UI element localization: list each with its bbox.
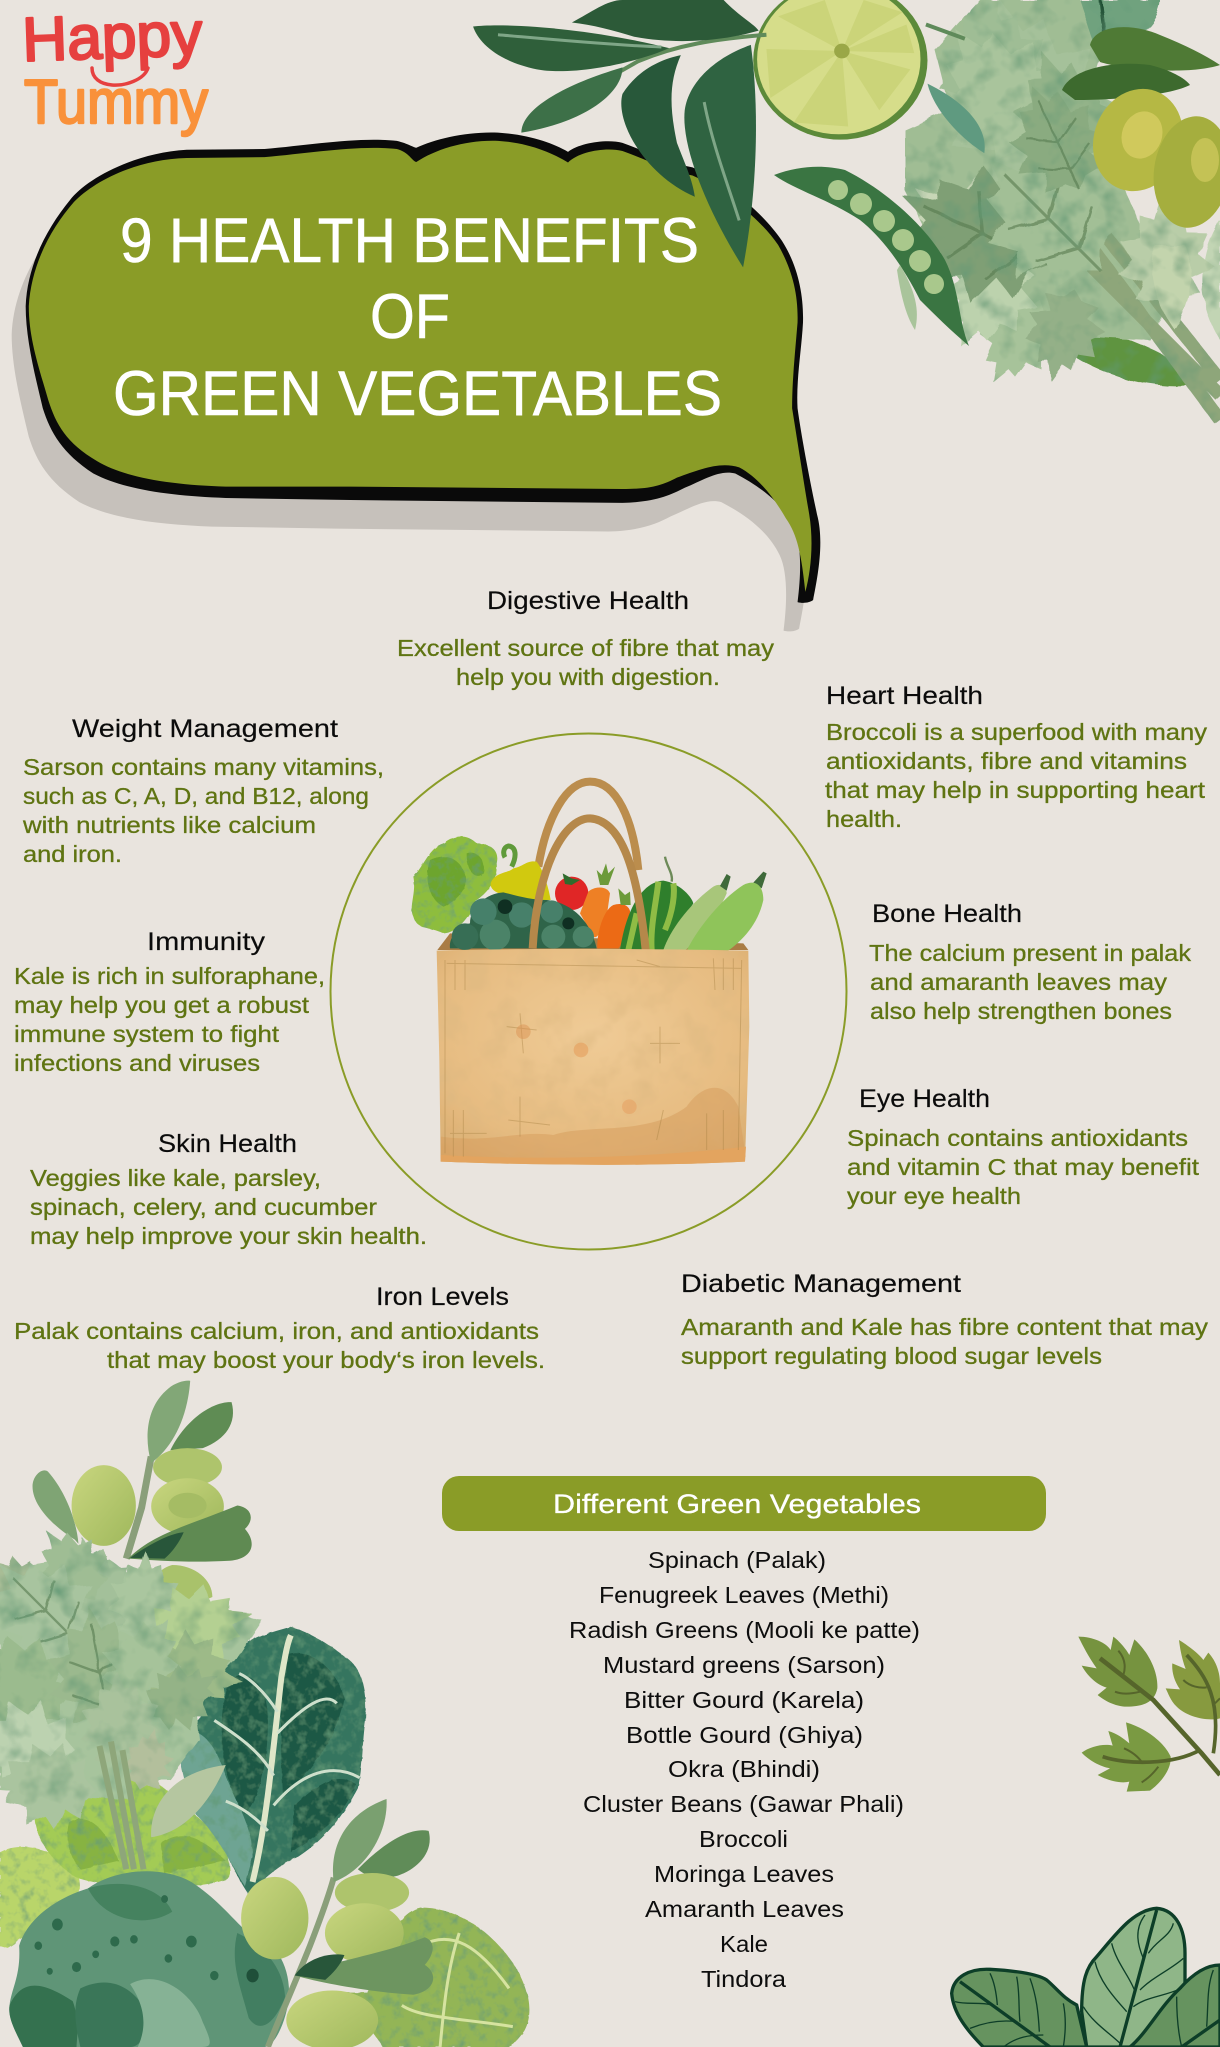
benefit: iron levels: that may boost your body‘s iron levels. (107, 1347, 545, 1373)
lettuce (412, 836, 497, 933)
parsley (888, 149, 1038, 295)
tomato (555, 877, 588, 910)
vegetable list: Amaranth Leaves (645, 1896, 844, 1922)
benefit: eye health (847, 1085, 1200, 1209)
benefit: eye health: your eye health (847, 1183, 1021, 1209)
illustration: olive branch and lime (473, 0, 985, 267)
illustration: bottom left foreground (9, 1742, 529, 2047)
benefit: heart health: antioxidants, fibre and vitamins (826, 748, 1187, 774)
lower olive sprig (241, 1799, 433, 2047)
benefit: bone health: also help strengthen bones (870, 998, 1172, 1024)
vegetable list: Fenugreek Leaves (Methi) (599, 1582, 889, 1608)
benefit: iron levels: Palak contains calcium, iron, and antioxidants (14, 1318, 539, 1344)
benefit: weight management: Sarson contains many vitamins, (23, 754, 384, 780)
benefit: eye health: and vitamin C that may benefit (847, 1154, 1200, 1180)
cabbage (337, 1907, 529, 2047)
illustration: pea pod (774, 167, 969, 346)
vegetable list: Bitter Gourd (Karela) (624, 1687, 864, 1713)
benefit: immunity: immune system to fight (14, 1021, 280, 1047)
benefit: immunity: Kale is rich in sulforaphane, (14, 963, 325, 989)
illustration: top right foliage (874, 0, 1220, 420)
benefit: digestive health: Excellent source of fibre that may (397, 635, 775, 661)
benefit: diabetic management (681, 1270, 1209, 1369)
stems (1075, 235, 1220, 420)
cucumber (1050, 325, 1196, 386)
benefit: eye health: Eye Health (859, 1085, 990, 1113)
bag body (437, 949, 749, 1165)
central circle (330, 734, 846, 1250)
title (113, 206, 722, 429)
front handle (533, 818, 646, 950)
title: 9 HEALTH BENEFITS (120, 206, 699, 276)
benefit: immunity: infections and viruses (14, 1050, 260, 1076)
illustration: bottom right spinach leaves (952, 1908, 1220, 2047)
leaf (473, 25, 669, 71)
broccoli (9, 1871, 289, 2047)
benefit: heart health: health. (826, 806, 902, 832)
benefit: eye health: Spinach contains antioxidants (847, 1125, 1188, 1151)
benefit: immunity: Immunity (147, 928, 266, 956)
benefit: weight management: and iron. (23, 841, 122, 867)
logo: Happy Tummy (21, 0, 208, 137)
dark top leaf (1010, 0, 1160, 62)
broccoli (450, 892, 597, 950)
vegetable list: Broccoli (699, 1826, 788, 1852)
benefit: skin health: may help improve your skin health. (30, 1223, 427, 1249)
benefit: iron levels (14, 1283, 545, 1373)
vegetable list: Moringa Leaves (654, 1861, 834, 1887)
illustration: bottom left upper olive sprig (33, 1381, 252, 1644)
vegetable list (569, 1547, 920, 1992)
title: OF (370, 282, 450, 352)
bag lower shading (441, 1088, 746, 1161)
benefit: skin health: spinach, celery, and cucumber (30, 1194, 377, 1220)
benefit: immunity (14, 928, 325, 1076)
vegetable list: Tindora (701, 1966, 787, 1992)
bubble shadow (12, 161, 806, 631)
benefit: weight management: Weight Management (72, 715, 338, 743)
illustration: olives and olive leaves (1062, 27, 1220, 233)
benefit: weight management (22, 715, 384, 867)
parsley stems (100, 1742, 144, 1869)
back handle (538, 782, 638, 870)
lime (753, 0, 927, 140)
benefit: diabetic management: Diabetic Management (681, 1270, 961, 1298)
parsley base mass (905, 0, 1170, 365)
benefit: bone health: and amaranth leaves may (870, 969, 1168, 995)
right edge leaf (1202, 220, 1220, 340)
benefit: digestive health: Digestive Health (487, 587, 689, 615)
bag bottom band (441, 1147, 746, 1165)
bag weave marks (445, 958, 742, 1157)
bubble outline (26, 133, 820, 603)
benefit: diabetic management: Amaranth and Kale has fibre content that may (681, 1314, 1209, 1340)
benefit: heart health: Heart Health (826, 682, 983, 710)
branch stem (545, 24, 965, 114)
benefit: heart health: Broccoli is a superfood with many (826, 719, 1208, 745)
benefit: skin health (30, 1130, 427, 1249)
benefit: skin health: Veggies like kale, parsley, (30, 1165, 321, 1191)
pale leaf (151, 1765, 226, 1837)
cucumbers (663, 872, 767, 952)
pill: different green vegetables (442, 1476, 1046, 1531)
benefit: digestive health: help you with digestion. (456, 664, 720, 690)
benefit: weight management: with nutrients like calcium (22, 812, 316, 838)
benefit: diabetic management: support regulating blood sugar levels (681, 1343, 1102, 1369)
benefit: heart health: that may help in supporting heart (825, 777, 1206, 803)
speech bubble title panel (12, 133, 820, 631)
vegetable list: Radish Greens (Mooli ke patte) (569, 1617, 920, 1643)
vegetable list: Kale (720, 1931, 768, 1957)
illustration: right twig (1078, 1637, 1220, 1792)
bag interior (437, 933, 748, 950)
illustration: parsley bunch (0, 1511, 263, 1834)
watermelon (620, 857, 693, 950)
benefit: bone health: Bone Health (872, 900, 1022, 928)
benefit: iron levels: Iron Levels (376, 1283, 509, 1311)
pill: different green vegetables: Different Green Vegetables (553, 1489, 921, 1519)
benefit: heart health (825, 682, 1208, 832)
carrots (580, 863, 631, 948)
benefit: bone health (869, 900, 1192, 1024)
illustration: bottom left lettuce (0, 1758, 230, 1948)
illustration: collard leaf (178, 1627, 366, 1895)
benefit: skin health: Skin Health (158, 1130, 297, 1158)
vegetable list: Mustard greens (Sarson) (603, 1652, 885, 1678)
pepper (491, 846, 551, 900)
benefit: weight management: such as C, A, D, and B12, along (23, 783, 369, 809)
vegetable list: Spinach (Palak) (648, 1547, 826, 1573)
vegetable list: Cluster Beans (Gawar Phali) (583, 1791, 904, 1817)
title: GREEN VEGETABLES (113, 359, 722, 429)
benefit: bone health: The calcium present in palak (869, 940, 1192, 966)
benefit: digestive health (397, 587, 775, 690)
illustration: vegetable bag (412, 782, 767, 1165)
vegetable list: Bottle Gourd (Ghiya) (626, 1722, 863, 1748)
benefit: immunity: may help you get a robust (14, 992, 310, 1018)
vegetable list: Okra (Bhindi) (668, 1756, 820, 1782)
logo: Happy Tummy: Happy (21, 0, 203, 75)
logo: Happy Tummy: Tummy (24, 68, 208, 137)
bubble fill (29, 141, 812, 592)
